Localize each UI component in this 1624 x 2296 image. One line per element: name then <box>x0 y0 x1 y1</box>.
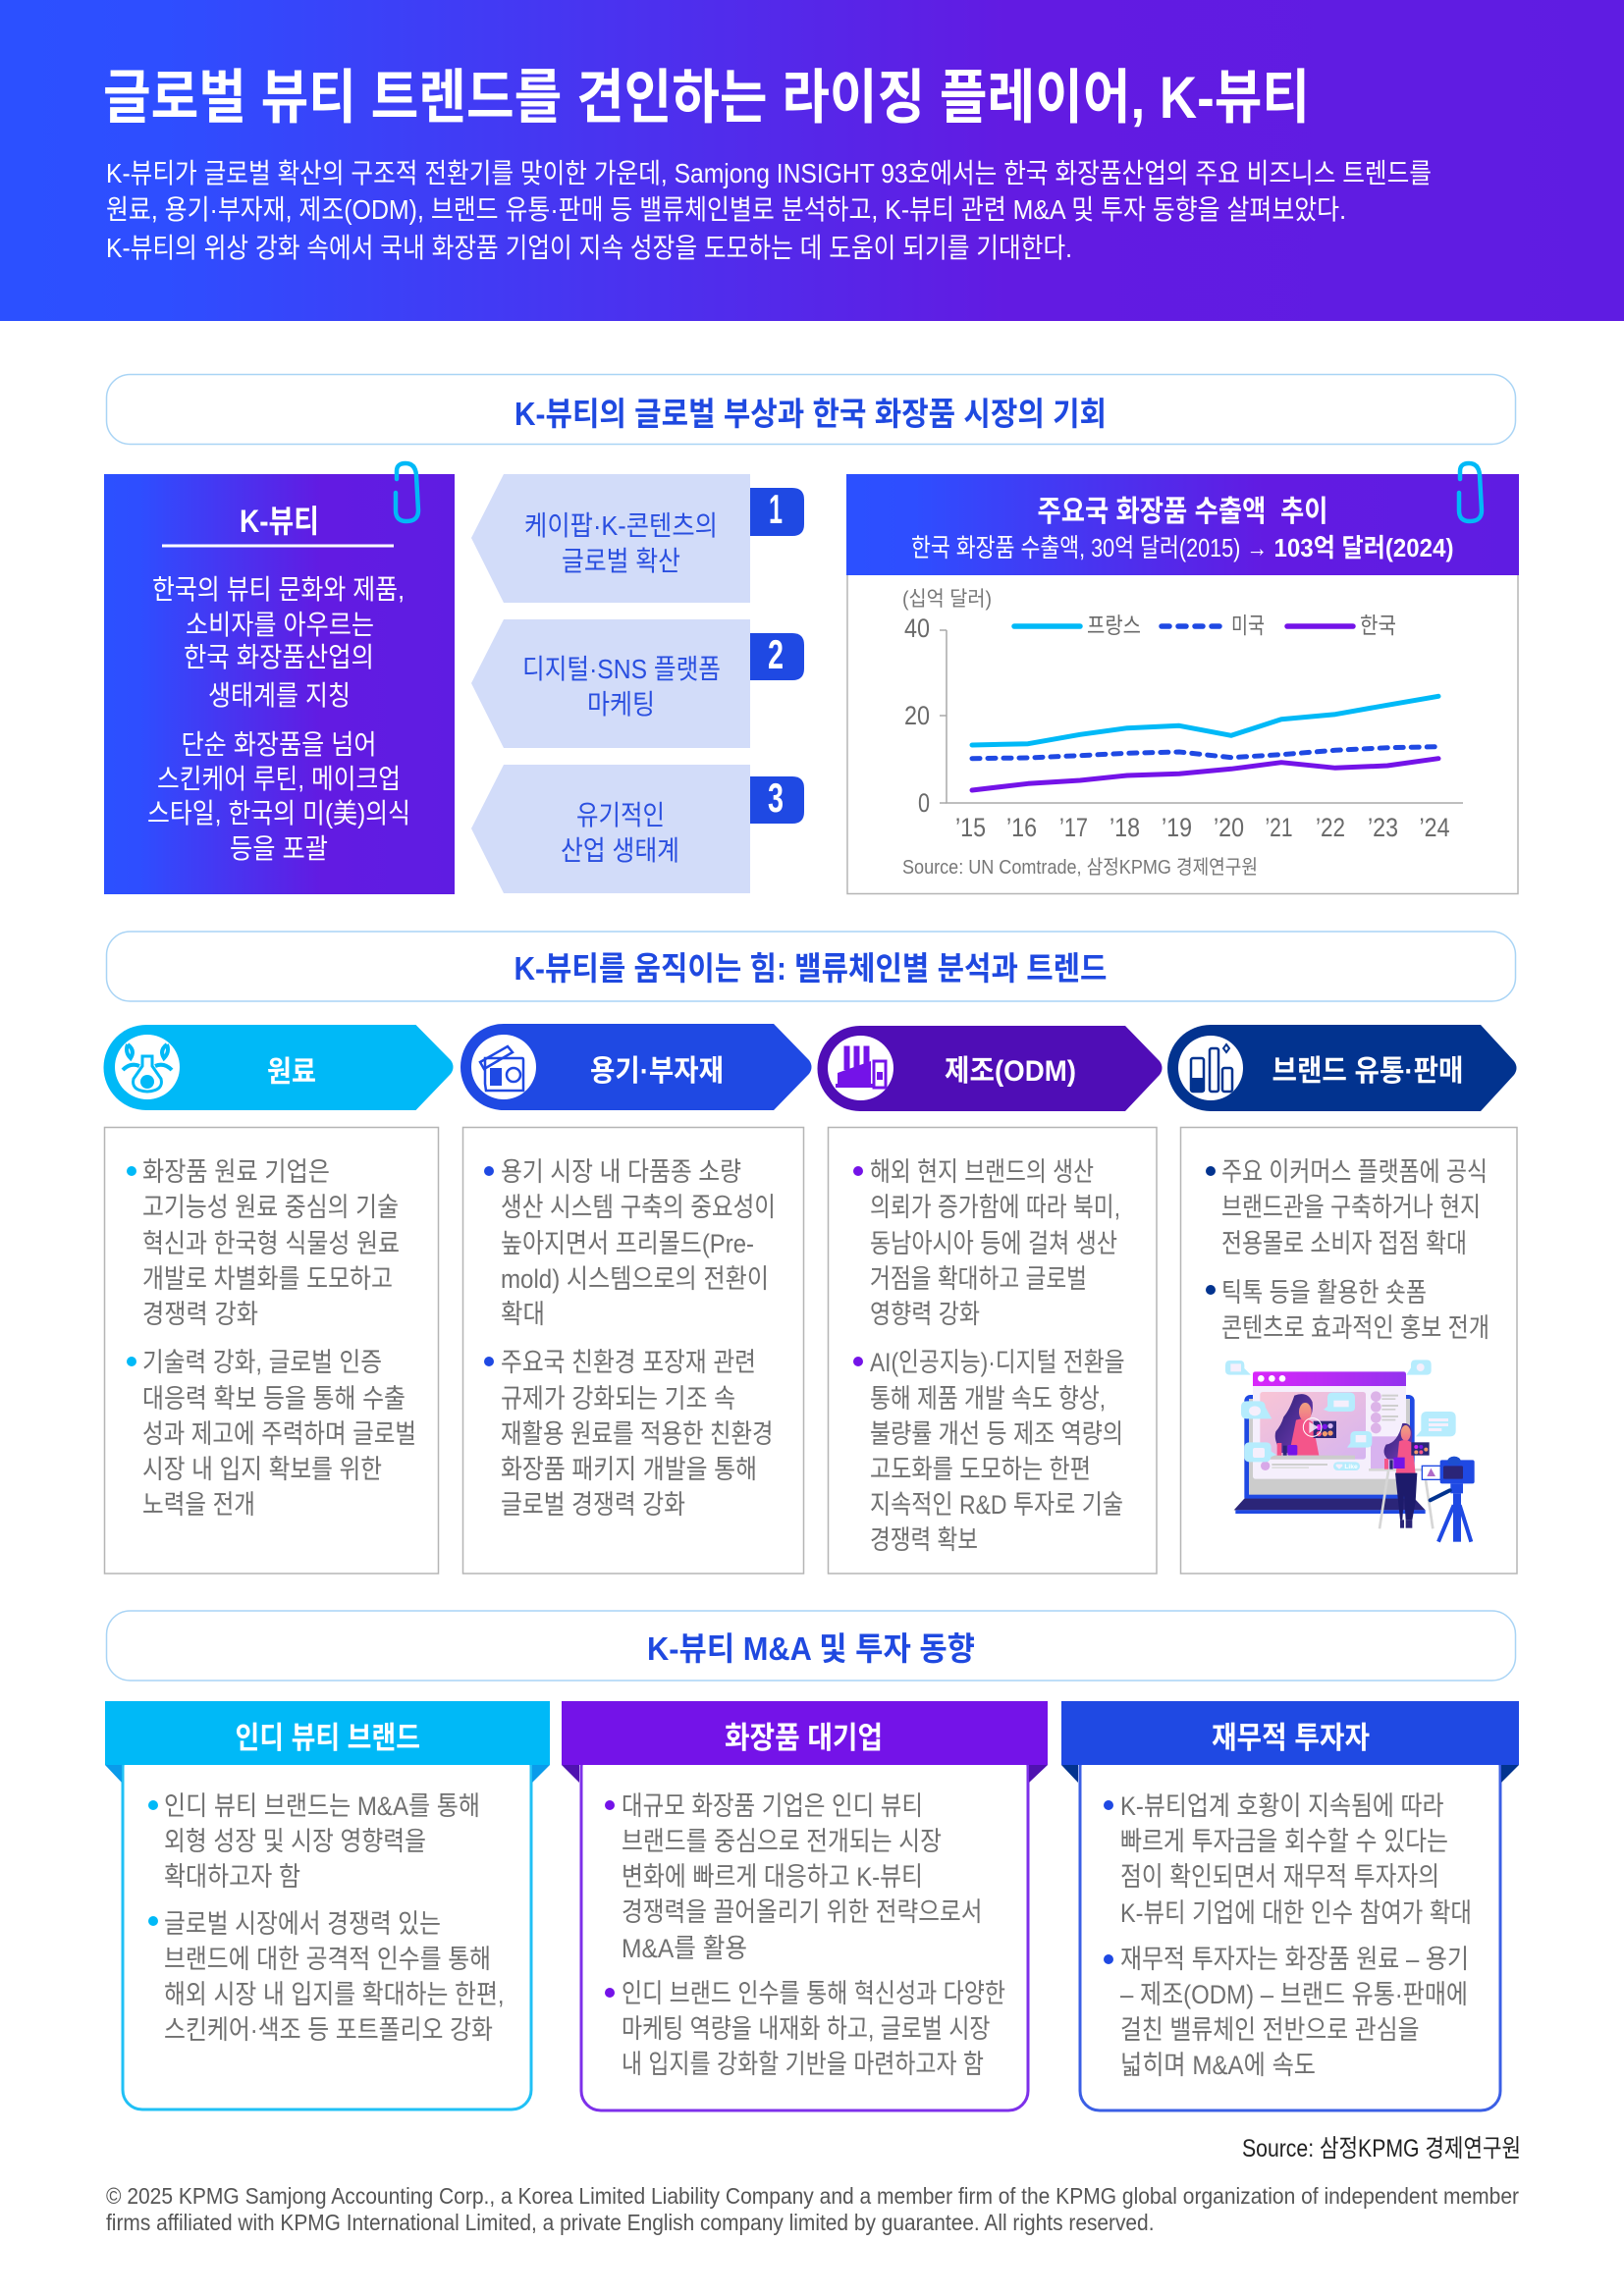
column: 제조(ODM) text: 의뢰가 증가함에 따라 북미, <box>870 1193 1120 1222</box>
icon: paper clip <box>1459 463 1482 521</box>
card: 인디 뷰티 브랜드: 확대하고자 함 <box>164 1862 300 1892</box>
column: 제조(ODM) text: 고도화를 도모하는 한편 <box>870 1455 1091 1484</box>
column: 용기·부자재 text <box>463 1127 803 1574</box>
column: 용기·부자재 text: 화장품 패키지 개발을 통해 <box>501 1455 757 1484</box>
chevron: 브랜드 유통·판매 <box>1167 1025 1516 1111</box>
column: 용기·부자재 text: 글로벌 경쟁력 강화 <box>501 1490 685 1520</box>
column: 용기·부자재 text: 주요국 친환경 포장재 관련 <box>501 1348 756 1377</box>
x axis labels <box>955 813 1449 842</box>
driver 2: digital SNS <box>471 619 804 748</box>
card: 재무적 투자자: 점이 확인되면서 재무적 투자자의 <box>1120 1862 1439 1892</box>
column: 제조(ODM) text: 경쟁력 확보 <box>870 1525 978 1555</box>
driver 1: K-content: 글로벌 확산 <box>562 546 680 576</box>
chart source: Source: UN Comtrade, 삼정KPMG 경제연구원 <box>902 856 1258 879</box>
y axis labels: 40 <box>904 614 930 643</box>
x axis labels: ’22 <box>1316 813 1345 842</box>
card: 화장품 대기업: 변화에 빠르게 대응하고 K-뷰티 <box>622 1862 923 1892</box>
legend: 프랑스 <box>1087 613 1141 638</box>
driver 1: K-content <box>471 474 804 603</box>
driver 2: digital SNS: 2 <box>768 631 784 677</box>
driver 2: digital SNS: 디지털·SNS 플랫폼 <box>522 654 721 684</box>
column: 제조(ODM) text: 통해 제품 개발 속도 향상, <box>870 1384 1106 1414</box>
y axis labels: 20 <box>904 701 930 730</box>
column: 용기·부자재 text: mold) 시스템으로의 전환이 <box>501 1264 769 1294</box>
column: 제조(ODM) text: 영향력 강화 <box>870 1300 980 1329</box>
column: 원료 text <box>104 1127 438 1574</box>
intro paragraph: K-뷰티가 글로벌 확산의 구조적 전환기를 맞이한 가운데, Samjong INSIGHT 93호에서는 한국 화장품산업의 주요 비즈니스 트렌드를 <box>106 158 1432 188</box>
speech bubbles <box>1225 1360 1456 1462</box>
panel: export chart <box>846 463 1519 893</box>
presenter figure <box>1384 1423 1412 1460</box>
icon: paper clip <box>396 463 418 521</box>
copyright footer: © 2025 KPMG Samjong Accounting Corp., a Korea Limited Liability Company and a member firm of the KPMG global organization of independent member <box>106 2183 1519 2209</box>
column: 원료 text: 고기능성 원료 중심의 기술 <box>142 1193 399 1222</box>
legend: 한국 <box>1360 613 1396 638</box>
card: 재무적 투자자: 재무적 투자자 <box>1212 1721 1370 1755</box>
driver 3: ecosystem <box>471 765 804 893</box>
card: 재무적 투자자: 재무적 투자자는 화장품 원료 – 용기 <box>1120 1945 1469 1974</box>
card: 화장품 대기업: M&A를 활용 <box>622 1934 747 1963</box>
chevron: 제조(ODM): 제조(ODM) <box>945 1055 1076 1088</box>
column: 원료 text: 혁신과 한국형 식물성 원료 <box>142 1229 400 1258</box>
card: 화장품 대기업: 대규모 화장품 기업은 인디 뷰티 <box>622 1791 923 1821</box>
card: 인디 뷰티 브랜드: 브랜드에 대한 공격적 인수를 통해 <box>164 1945 491 1974</box>
column: 용기·부자재 text: 생산 시스템 구축의 중요성이 <box>501 1193 776 1222</box>
x axis labels: ’20 <box>1214 813 1244 842</box>
column: 용기·부자재 text: 규제가 강화되는 기조 속 <box>501 1384 735 1414</box>
card: 인디 뷰티 브랜드: 해외 시장 내 입지를 확대하는 한편, <box>164 1980 505 2009</box>
x axis labels: ’18 <box>1110 813 1140 842</box>
card: 화장품 대기업 <box>562 1701 1048 2110</box>
card: 인디 뷰티 브랜드 <box>105 1701 550 2109</box>
column: 제조(ODM) text: 불량률 개선 등 제조 역량의 <box>870 1419 1123 1449</box>
intro paragraph <box>106 158 1432 263</box>
column: 원료 text: 노력을 전개 <box>142 1490 255 1520</box>
chevron: 용기·부자재: 용기·부자재 <box>590 1055 724 1088</box>
unit label: (십억 달러) <box>902 588 992 611</box>
column: 원료 text: 시장 내 입지 확보를 위한 <box>142 1455 382 1484</box>
x axis labels: ’15 <box>955 813 986 842</box>
axes <box>940 630 1463 803</box>
column: 브랜드 유통·판매 text and illustration: 주요 이커머스 플랫폼에 공식 <box>1221 1157 1488 1187</box>
camera on tripod <box>1422 1466 1440 1479</box>
card: 인디 뷰티 브랜드: 인디 뷰티 브랜드 <box>236 1721 420 1755</box>
card: 화장품 대기업: 화장품 대기업 <box>725 1721 883 1755</box>
y axis labels <box>904 614 930 818</box>
chart header: 주요국 화장품 수출액 추이 <box>1037 496 1327 528</box>
card: 화장품 대기업: 경쟁력을 끌어올리기 위한 전략으로서 <box>622 1897 982 1927</box>
table <box>1369 1469 1433 1528</box>
x axis labels: ’23 <box>1368 813 1398 842</box>
column: 제조(ODM) text <box>829 1127 1157 1574</box>
chevron: 브랜드 유통·판매: 브랜드 유통·판매 <box>1272 1055 1463 1088</box>
column: 원료 text: 경쟁력 강화 <box>142 1300 258 1329</box>
x axis labels: ’21 <box>1265 813 1292 842</box>
column: 원료 text: 성과 제고에 주력하며 글로벌 <box>142 1419 416 1449</box>
panel text: 스킨케어 루틴, 메이크업 <box>157 764 401 794</box>
x axis labels: ’17 <box>1059 813 1088 842</box>
section heading: K-뷰티의 글로벌 부상: K-뷰티의 글로벌 부상과 한국 화장품 시장의 기회 <box>514 396 1107 432</box>
column: 브랜드 유통·판매 text and illustration <box>1180 1127 1517 1574</box>
column: 원료 text: 개발로 차별화를 도모하고 <box>142 1264 393 1294</box>
icon: flask with leaves <box>115 1035 180 1099</box>
column: 제조(ODM) text: 지속적인 R&D 투자로 기술 <box>870 1490 1123 1520</box>
panel text: 스타일, 한국의 미(美)의식 <box>147 798 410 828</box>
driver 3: ecosystem: 유기적인 <box>576 800 665 830</box>
chevron: 용기·부자재 <box>460 1024 811 1110</box>
driver 3: ecosystem: 산업 생태계 <box>561 835 679 866</box>
card: 화장품 대기업: 마케팅 역량을 내재화 하고, 글로벌 시장 <box>622 2014 990 2044</box>
card: 재무적 투자자: – 제조(ODM) – 브랜드 유통·판매에 <box>1120 1980 1468 2009</box>
intro paragraph: 원료, 용기·부자재, 제조(ODM), 브랜드 유통·판매 등 밸류체인별로 분석하고, K-뷰티 관련 M&A 및 투자 동향을 살펴보았다. <box>106 194 1346 225</box>
section heading: K-뷰티의 글로벌 부상 <box>106 375 1516 444</box>
driver 1: K-content: 케이팝·K-콘텐츠의 <box>524 510 718 541</box>
panel text: 등을 포괄 <box>230 833 328 864</box>
chart header <box>846 474 1519 575</box>
illustration: live commerce creator: Like <box>1344 1464 1358 1470</box>
main title: 글로벌 뷰티 트렌드를 견인하는 라이징 플레이어, K-뷰티 <box>103 65 1310 131</box>
panel text: 소비자를 아우르는 <box>186 610 374 640</box>
panel text: 생태계를 지칭 <box>208 680 351 711</box>
column: 제조(ODM) text: AI(인공지능)·디지털 전환을 <box>870 1348 1125 1377</box>
line: USA <box>972 747 1438 759</box>
card: 재무적 투자자: 빠르게 투자금을 회수할 수 있다는 <box>1120 1827 1448 1856</box>
card: 인디 뷰티 브랜드: 인디 뷰티 브랜드는 M&A를 통해 <box>164 1791 480 1821</box>
header banner <box>0 0 1624 321</box>
x axis labels: ’24 <box>1420 813 1449 842</box>
chevron: 제조(ODM) <box>818 1026 1163 1111</box>
column: 제조(ODM) text: 동남아시아 등에 걸쳐 생산 <box>870 1229 1117 1258</box>
panel text: 단순 화장품을 넘어 <box>181 729 377 760</box>
column: 용기·부자재 text: 높아지면서 프리몰드(Pre- <box>501 1229 754 1258</box>
panel heading: K-뷰티 <box>240 504 319 539</box>
x axis labels: ’16 <box>1006 813 1037 842</box>
card: 화장품 대기업: 브랜드를 중심으로 전개되는 시장 <box>622 1827 942 1856</box>
column: 원료 text: 화장품 원료 기업은 <box>142 1157 330 1187</box>
chevron: 원료 <box>103 1025 453 1110</box>
card: 재무적 투자자: 걸친 밸류체인 전반으로 관심을 <box>1120 2015 1420 2045</box>
section heading: value chain: K-뷰티를 움직이는 힘: 밸류체인별 분석과 트렌드 <box>514 950 1108 987</box>
section heading: M&A: K-뷰티 M&A 및 투자 동향 <box>647 1630 975 1667</box>
chevron: 원료: 원료 <box>267 1056 316 1089</box>
column: 브랜드 유통·판매 text and illustration: 전용몰로 소비자 접점 확대 <box>1221 1229 1467 1258</box>
column: 브랜드 유통·판매 text and illustration: 틱톡 등을 활용한 숏폼 <box>1221 1278 1427 1308</box>
source note: Source: 삼정KPMG 경제연구원 <box>1242 2135 1521 2163</box>
card: 재무적 투자자: K-뷰티업계 호황이 지속됨에 따라 <box>1120 1791 1444 1821</box>
card: 재무적 투자자: K-뷰티 기업에 대한 인수 참여가 확대 <box>1120 1898 1472 1928</box>
panel: K-뷰티 definition <box>104 463 455 894</box>
card: 재무적 투자자: 넓히며 M&A에 속도 <box>1120 2051 1316 2080</box>
column: 제조(ODM) text: 거점을 확대하고 글로벌 <box>870 1264 1087 1294</box>
panel text: 한국의 뷰티 문화와 제품, <box>152 574 405 605</box>
section heading: M&A <box>106 1611 1516 1681</box>
chart header: 한국 화장품 수출액, 30억 달러(2015) → <box>911 533 1268 562</box>
column: 브랜드 유통·판매 text and illustration: 콘텐츠로 효과적인 홍보 전개 <box>1221 1313 1489 1343</box>
column: 용기·부자재 text: 재활용 원료를 적용한 친환경 <box>501 1419 774 1449</box>
line: France <box>972 696 1438 745</box>
panel text <box>147 574 410 864</box>
driver 3: ecosystem: 3 <box>768 774 784 821</box>
panel text: 한국 화장품산업의 <box>184 642 374 672</box>
card: 인디 뷰티 브랜드: 글로벌 시장에서 경쟁력 있는 <box>164 1909 441 1939</box>
column: 제조(ODM) text: 해외 현지 브랜드의 생산 <box>870 1157 1094 1187</box>
legend: 미국 <box>1231 613 1265 638</box>
column: 용기·부자재 text: 확대 <box>501 1300 545 1329</box>
column: 원료 text: 기술력 강화, 글로벌 인증 <box>142 1348 382 1377</box>
column: 원료 text: 대응력 확보 등을 통해 수출 <box>142 1384 406 1414</box>
chart header: 103억 달러(2024) <box>1274 533 1453 562</box>
card: 화장품 대기업: 인디 브랜드 인수를 통해 혁신성과 다양한 <box>622 1979 1005 2008</box>
x axis labels: ’19 <box>1162 813 1192 842</box>
driver 2: digital SNS: 마케팅 <box>587 689 655 720</box>
section heading: value chain <box>106 932 1516 1001</box>
card: 화장품 대기업: 내 입지를 강화할 기반을 마련하고자 함 <box>622 2050 984 2079</box>
driver 1: K-content: 1 <box>769 486 783 532</box>
line: Korea <box>972 759 1438 790</box>
copyright footer: firms affiliated with KPMG International Limited, a private English company limited by guarantee. All rights reserved. <box>106 2210 1155 2235</box>
icon: cosmetic bottles <box>1178 1036 1243 1100</box>
card: 인디 뷰티 브랜드: 스킨케어·색조 등 포트폴리오 강화 <box>164 2015 493 2045</box>
icon: factory <box>828 1036 893 1100</box>
intro paragraph: K-뷰티의 위상 강화 속에서 국내 화장품 기업이 지속 성장을 도모하는 데 도움이 되기를 기대한다. <box>106 233 1072 263</box>
icon: package box <box>471 1035 536 1099</box>
legend <box>1014 613 1396 638</box>
illustration: live commerce creator <box>1225 1360 1475 1542</box>
y axis labels: 0 <box>918 788 930 818</box>
card: 인디 뷰티 브랜드: 외형 성장 및 시장 영향력을 <box>164 1827 426 1856</box>
card: 재무적 투자자 <box>1061 1701 1519 2110</box>
copyright footer <box>106 2183 1519 2235</box>
column: 용기·부자재 text: 용기 시장 내 다품종 소량 <box>501 1157 741 1187</box>
column: 브랜드 유통·판매 text and illustration: 브랜드관을 구축하거나 현지 <box>1221 1193 1481 1222</box>
